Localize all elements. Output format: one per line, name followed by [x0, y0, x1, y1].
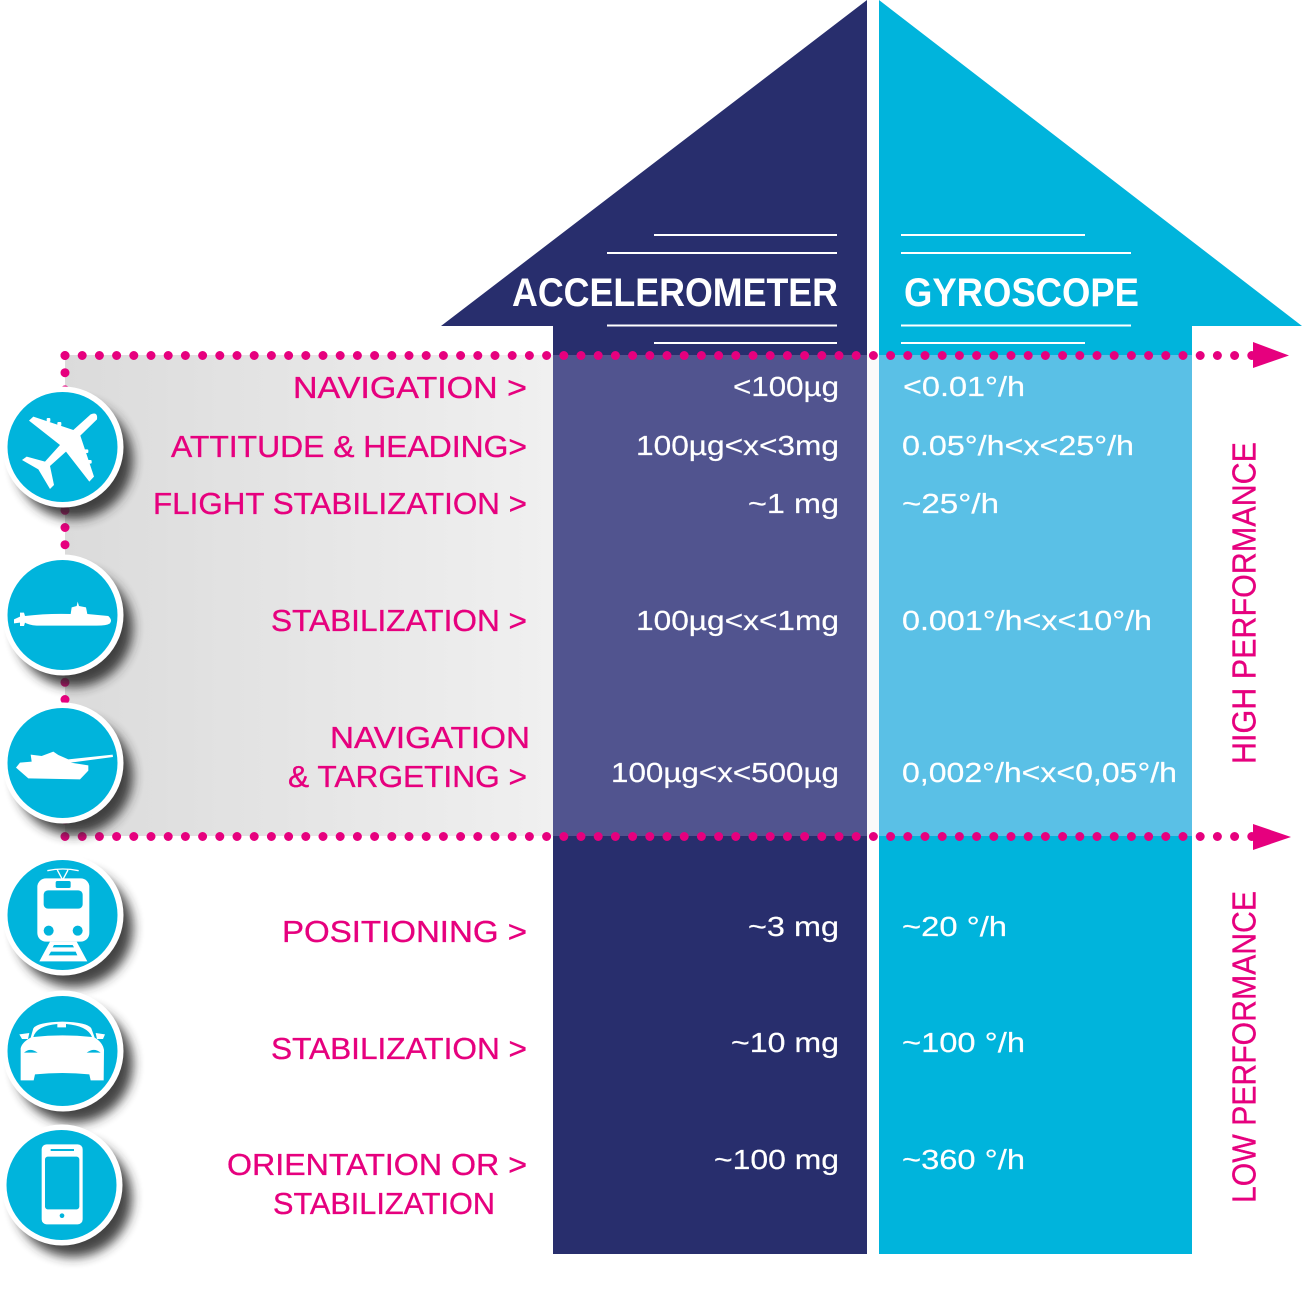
gyroscope value 7: ~100 °/h [902, 1027, 1025, 1058]
accelerometer value 3: ~1 mg [748, 488, 839, 519]
panel: accelerometer high performance overlay [553, 355, 867, 836]
icon: train [2, 854, 133, 987]
icon: airplane [2, 386, 133, 519]
label: navigation and targeting [288, 720, 530, 794]
left dotted column [60, 356, 70, 830]
label: navigation and targeting: NAVIGATION [330, 720, 530, 755]
vertical label: low performance: LOW PERFORMANCE [1226, 891, 1262, 1203]
icon: submarine [2, 554, 133, 687]
lower dotted arrow [65, 824, 1291, 850]
label: navigation: NAVIGATION > [293, 370, 527, 405]
panel: centre gap tint [867, 355, 879, 836]
label: attitude and heading: ATTITUDE & HEADING> [171, 429, 527, 464]
accelerometer heading: ACCELEROMETER [512, 271, 838, 315]
gyroscope value 5: 0,002°/h<x<0,05°/h [902, 757, 1177, 788]
label: orientation or stabilization: STABILIZATION [273, 1186, 495, 1221]
panel: gyroscope high performance overlay [879, 355, 1192, 836]
label: orientation or stabilization [227, 1147, 527, 1221]
gyroscope value 6: ~20 °/h [902, 911, 1007, 942]
gyroscope heading: GYROSCOPE [904, 271, 1139, 315]
label: stabilization car: STABILIZATION > [271, 1031, 527, 1066]
panel: high performance grey band [65, 355, 553, 836]
label: navigation and targeting: & TARGETING > [288, 759, 527, 794]
accelerometer value 2: 100µg<x<3mg [636, 430, 839, 461]
accelerometer value 6: ~3 mg [748, 911, 839, 942]
accelerometer value 1: <100µg [733, 371, 839, 402]
arrow: gyroscope column [879, 0, 1302, 1254]
label: orientation or stabilization: ORIENTATION OR > [227, 1147, 527, 1182]
label: stabilization submarine: STABILIZATION > [271, 603, 527, 638]
gyroscope value 3: ~25°/h [902, 488, 999, 519]
accelerometer value 4: 100µg<x<1mg [636, 605, 839, 636]
accelerometer value 7: ~10 mg [731, 1027, 839, 1058]
label: positioning: POSITIONING > [282, 914, 527, 949]
arrow: accelerometer column [441, 0, 867, 1254]
accelerometer value 5: 100µg<x<500µg [611, 757, 839, 788]
gyroscope value 2: 0.05°/h<x<25°/h [902, 430, 1134, 461]
gyroscope value 4: 0.001°/h<x<10°/h [902, 605, 1152, 636]
icon: smartphone [2, 1124, 132, 1257]
accelerometer value 8: ~100 mg [714, 1144, 839, 1175]
icon: tank [2, 702, 133, 835]
label: flight stabilization: FLIGHT STABILIZATION > [153, 486, 527, 521]
vertical label: high performance: HIGH PERFORMANCE [1226, 442, 1262, 764]
icon: car [2, 990, 133, 1123]
gyroscope value 8: ~360 °/h [902, 1144, 1025, 1175]
upper dotted arrow [65, 342, 1289, 368]
gyroscope value 1: <0.01°/h [903, 371, 1025, 402]
